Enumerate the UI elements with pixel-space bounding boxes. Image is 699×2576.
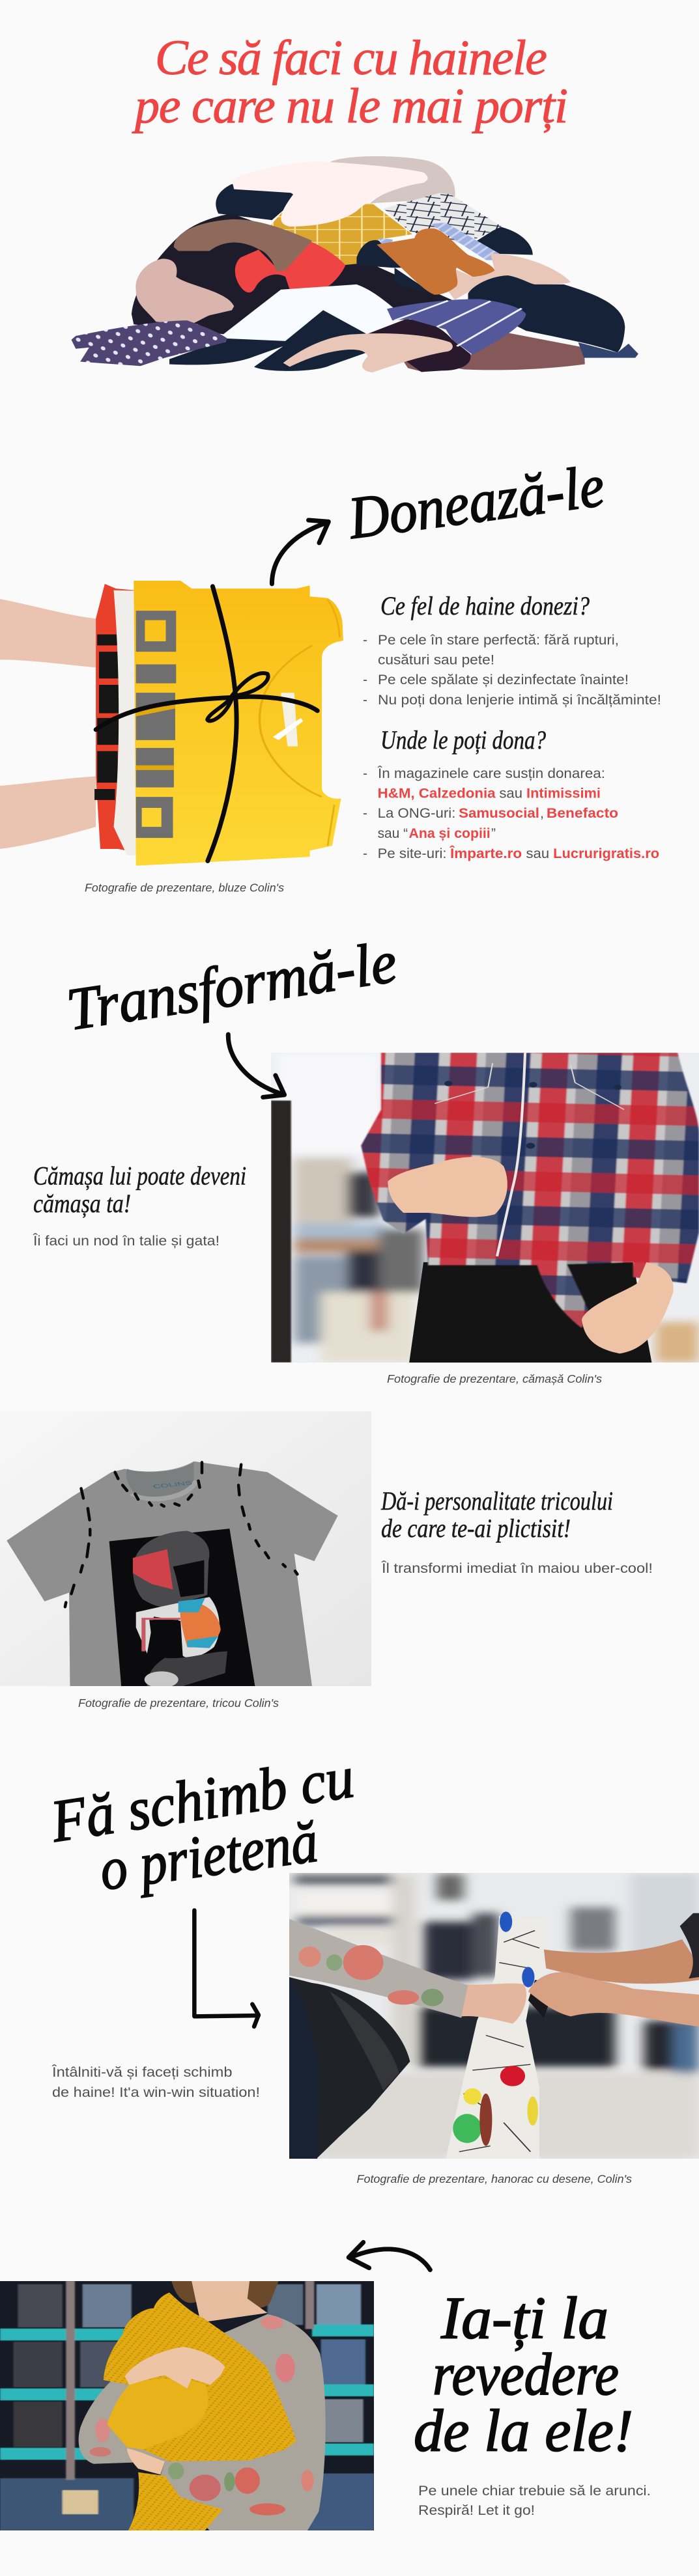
text: let it go: Respiră! Let it go! xyxy=(418,2503,535,2518)
text: exchange tip: de haine! It'a win-win situation! xyxy=(52,2085,260,2100)
list: what you can donate: Nu poți dona lenjerie intimă și încălțăminte! xyxy=(378,693,661,708)
list: where to donate: - xyxy=(363,846,367,861)
title: pe care nu le mai porți xyxy=(132,79,568,133)
list: where to donate: sau xyxy=(526,846,549,861)
list: where to donate: sau “ xyxy=(378,826,408,841)
caption: bluze: Fotografie de prezentare, bluze Colin's xyxy=(85,881,284,894)
list: where to donate: - xyxy=(363,806,367,821)
photo: grey t-shirt with cut lines xyxy=(0,1411,371,1686)
text: let it go xyxy=(418,2484,651,2518)
heading: Cămașa lui poate deveni xyxy=(33,1161,246,1218)
arrow: to yellow scarf photo xyxy=(349,2242,430,2270)
text: exchange tip: Întâlniti-vă și faceți schimb xyxy=(51,2065,232,2080)
heading: Fă schimb cu o prietenă: Fă schimb cu xyxy=(46,1743,358,1855)
list: what you can donate: - xyxy=(363,693,367,708)
arrow: L-shaped to exchange photo xyxy=(194,1910,259,2027)
heading: Donează-le: Donează-le xyxy=(343,452,608,551)
list: where to donate: În magazinele care susțin donarea: xyxy=(377,766,605,781)
photo: woman hugging yellow scarf xyxy=(0,2281,374,2530)
list: what you can donate: Pe cele spălate și dezinfectate înainte! xyxy=(378,672,629,687)
list: what you can donate xyxy=(363,633,661,708)
list: where to donate: ” xyxy=(491,826,496,841)
list: what you can donate: cusături sau pete! xyxy=(378,652,494,668)
photo: folded t-shirts tied with ribbon xyxy=(0,581,343,866)
list: where to donate: Lucrurigratis.ro xyxy=(553,846,659,861)
text: exchange tip xyxy=(51,2065,260,2100)
list: what you can donate: - xyxy=(363,633,367,648)
illustration: pile of clothes xyxy=(71,156,638,372)
caption: tricou: Fotografie de prezentare, tricou Colin's xyxy=(78,1697,279,1710)
list: where to donate: Benefacto xyxy=(547,806,618,821)
heading: Cămașa lui poate deveni: Cămașa lui poate deveni xyxy=(33,1161,246,1190)
heading: Ia-ți la revedere de la ele: Ia-ți la xyxy=(440,2285,608,2351)
arrow: to donate heading xyxy=(272,520,328,584)
caption: cămașă: Fotografie de prezentare, cămașă Colin's xyxy=(387,1372,602,1385)
list: where to donate: sau xyxy=(499,786,522,801)
photo: plaid shirt tied at waist xyxy=(271,1053,699,1363)
heading: Cămașa lui poate deveni: cămașa ta! xyxy=(33,1189,131,1218)
heading: Unde le poți dona: Unde le poți dona? xyxy=(380,725,546,755)
list: where to donate: Ana și copiii xyxy=(409,826,491,841)
title: Ce să faci cu hainele xyxy=(155,31,547,85)
heading: Fă schimb cu o prietenă xyxy=(46,1743,358,1903)
heading: Dă-i personalitate tricoului: Dă-i personalitate tricoului xyxy=(380,1486,613,1516)
list: where to donate: - xyxy=(363,766,367,781)
list: where to donate xyxy=(363,766,659,861)
list: where to donate: Intimissimi xyxy=(526,786,601,801)
list: where to donate: Împarte.ro xyxy=(449,846,522,861)
list: where to donate: H&M, Calzedonia xyxy=(378,786,496,801)
photo: grey t-shirt with cut lines: COLINS xyxy=(152,1480,193,1489)
list: where to donate: Samusocial xyxy=(459,806,539,821)
heading: Dă-i personalitate tricoului: de care te-ai plictisit! xyxy=(381,1514,571,1543)
heading: Ia-ți la revedere de la ele: de la ele! xyxy=(414,2398,633,2464)
caption: hanorac: Fotografie de prezentare, hanorac cu desene, Colin's xyxy=(357,2172,632,2185)
list: where to donate: La ONG-uri: xyxy=(378,806,455,821)
list: where to donate: Pe site-uri: xyxy=(378,846,447,861)
title xyxy=(132,31,568,133)
heading: Dă-i personalitate tricoului xyxy=(380,1486,613,1543)
arrow: to shirt photo xyxy=(228,1034,285,1097)
list: what you can donate: Pe cele în stare perfectă: fără rupturi, xyxy=(378,633,619,648)
text: t-shirt tip: Îl transformi imediat în maiou uber-cool! xyxy=(381,1561,653,1576)
heading: Fă schimb cu o prietenă: o prietenă xyxy=(96,1808,322,1903)
heading: Ce fel de haine donezi: Ce fel de haine donezi? xyxy=(380,591,590,620)
text: shirt tip: Îi faci un nod în talie și gata! xyxy=(33,1234,220,1249)
list: what you can donate: - xyxy=(363,672,367,687)
heading: Ia-ți la revedere de la ele: revedere xyxy=(433,2341,619,2407)
text: let it go: Pe unele chiar trebuie să le arunci. xyxy=(418,2484,651,2499)
photo: two women exchanging a printed hoodie xyxy=(289,1873,699,2159)
heading: Transformă-le: Transformă-le xyxy=(63,928,401,1043)
list: where to donate: , xyxy=(540,806,544,821)
heading: Ia-ți la revedere de la ele xyxy=(414,2285,633,2464)
